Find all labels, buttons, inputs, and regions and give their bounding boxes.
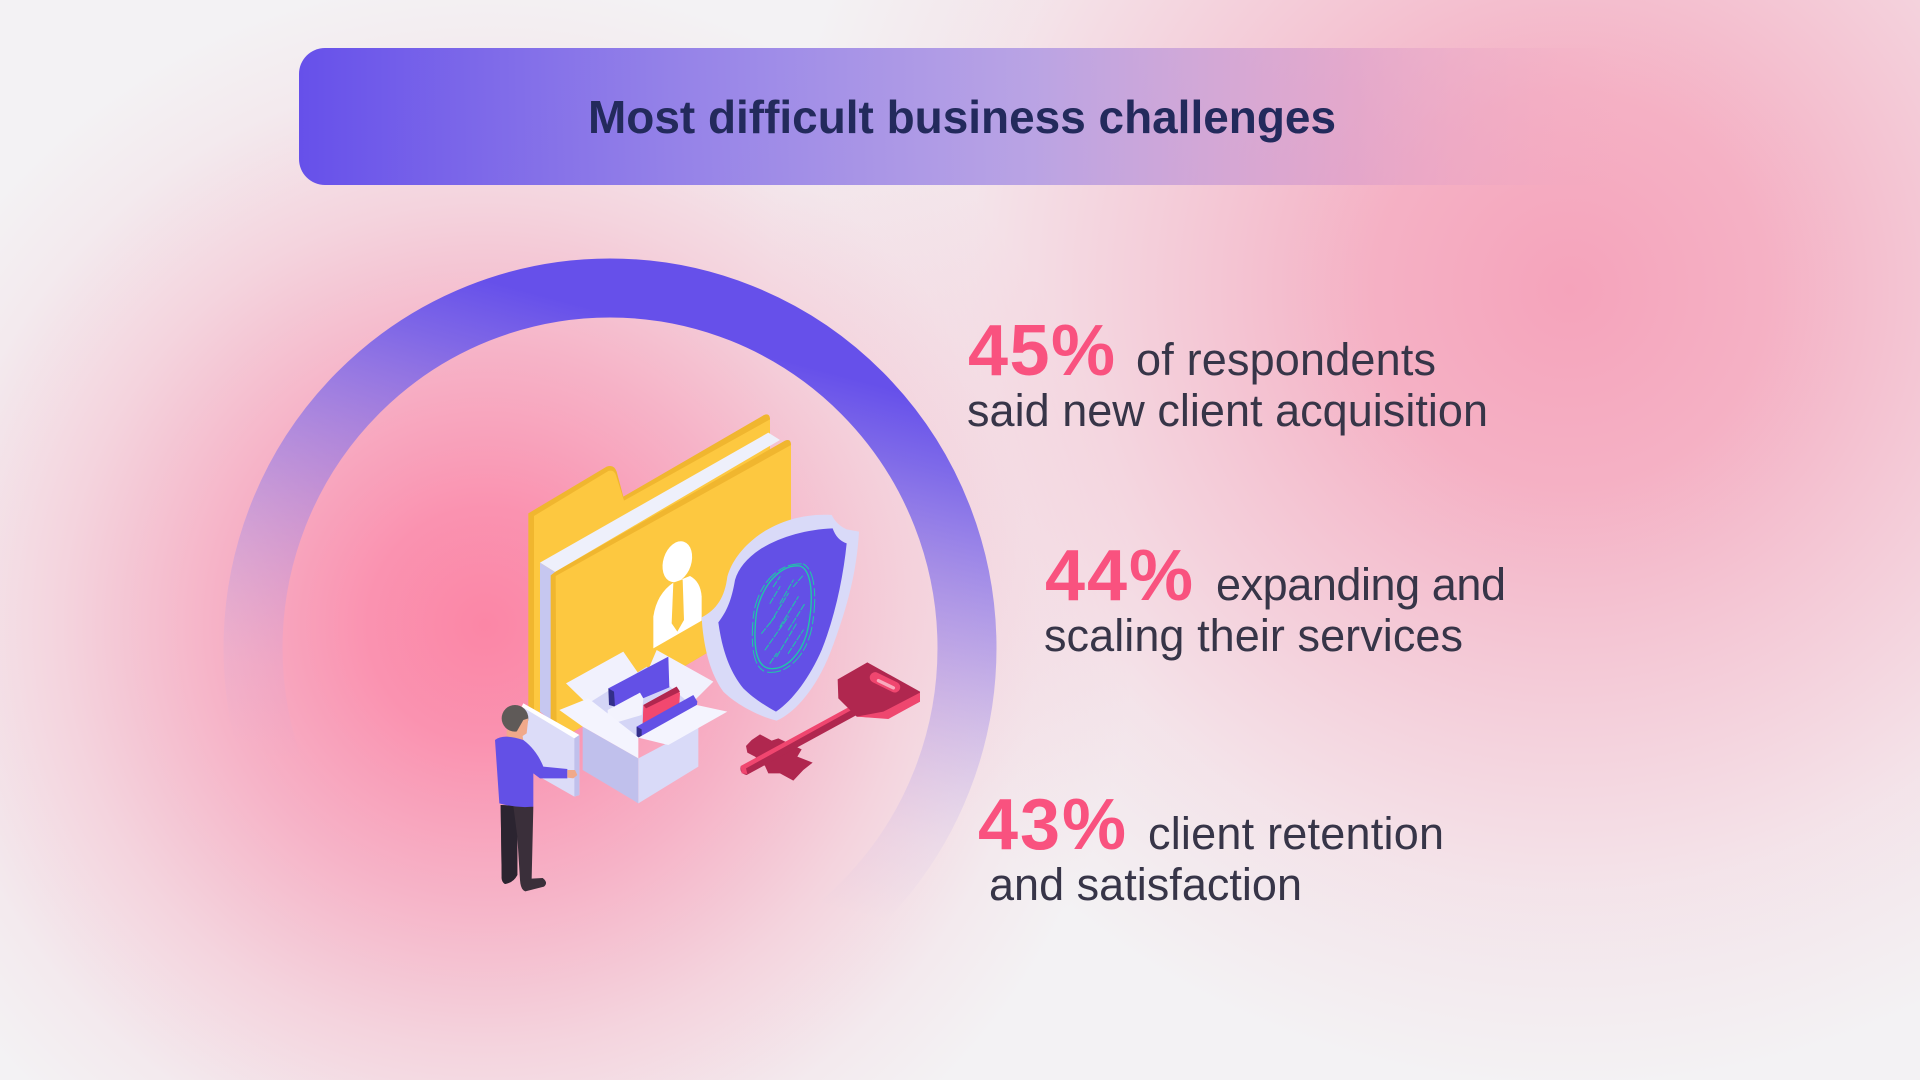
stat: 43%: and satisfaction [989,859,1302,910]
title banner [299,48,1620,185]
stat: 43% [978,785,1444,910]
key [740,662,920,781]
title: Most difficult business challenges [588,91,1336,143]
folder [528,414,791,742]
stat: 45%: 45% [968,311,1115,391]
stat: 43%: 43% [978,785,1126,865]
illustration: folder, shield, key, box and person [495,414,920,891]
stat: 45%: of respondents [1136,334,1436,385]
person emblem [653,537,702,648]
stat: 44%: 44% [1045,536,1193,616]
gradient ring [253,288,967,1008]
fingerprint [752,564,815,672]
stat: 44%: scaling their services [1044,610,1463,661]
stat: 43%: client retention [1148,808,1444,859]
stat: 44%: expanding and [1216,559,1506,610]
stat: 44% [1044,536,1506,661]
open box with books [559,650,727,803]
stat: 45%: said new client acquisition [967,385,1488,436]
person with panel [495,703,579,891]
shield [702,515,859,721]
stat: 45% [967,311,1488,436]
